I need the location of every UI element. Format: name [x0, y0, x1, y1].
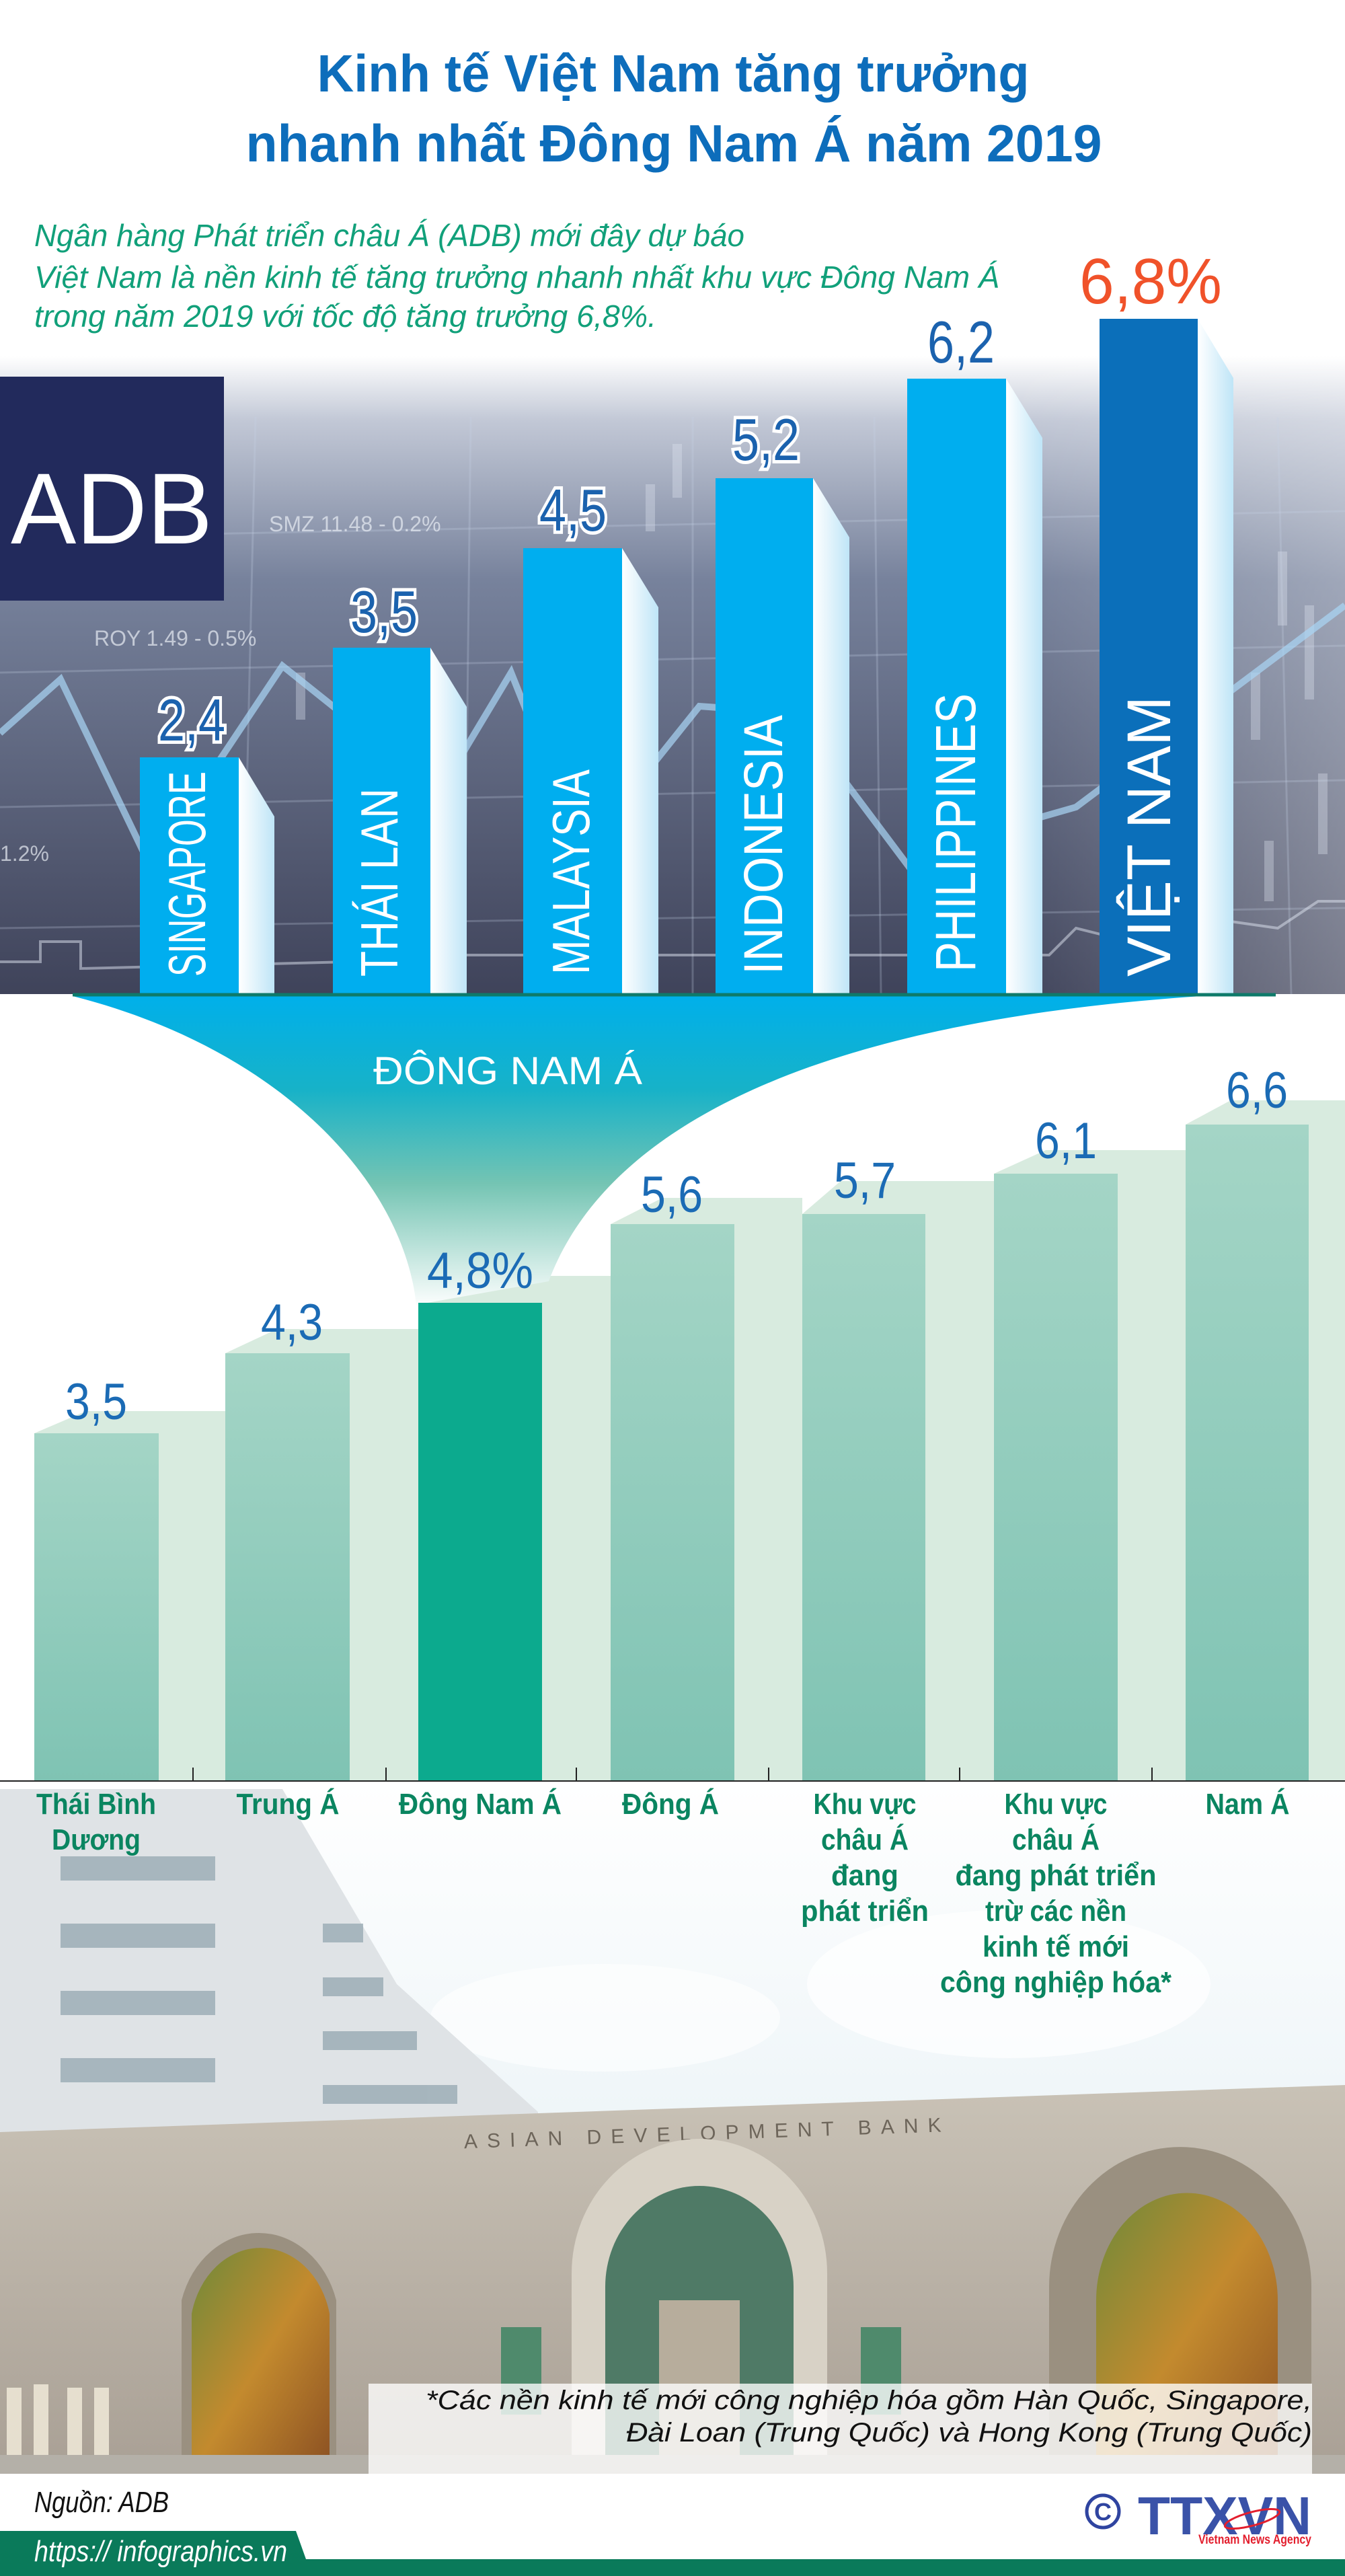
bar: Thái Lan: 3,5 — [350, 578, 418, 645]
bar: Thái Bình Dương — [34, 1373, 159, 1781]
bottom photo: ADB building: ASIAN DEVELOPMENT BANK — [463, 2114, 942, 2153]
category labels: Đông Á — [622, 1787, 719, 1821]
category labels: đang — [831, 1859, 898, 1892]
category labels: trừ các nền — [985, 1895, 1126, 1928]
background: stock market photo: ROY 1.49 - 0.5% — [94, 626, 256, 650]
footer band: https:// infographics.vn — [34, 2535, 287, 2568]
footnote — [369, 2384, 1312, 2474]
bar: Việt Nam: 6,8% — [1079, 245, 1222, 317]
logo: TTXVN: TTXVN — [1138, 2486, 1311, 2546]
bar: Đông Nam Á — [418, 1242, 542, 1781]
footer band — [0, 2531, 1345, 2576]
category labels: đang phát triển — [955, 1859, 1157, 1892]
background: stock market photo: 1.2% — [0, 841, 49, 866]
source: Nguồn: ADB — [34, 2486, 169, 2519]
axis line — [0, 1768, 1345, 1781]
bar: Trung Á — [225, 1294, 350, 1781]
bar: châu Á đang phát triển trừ NIEs: 6,1 — [1035, 1112, 1097, 1170]
lower chart: back shapes — [34, 1100, 1345, 1781]
subtitle text: Ngân hàng Phát triển châu Á (ADB) mới đây dự báo — [34, 218, 744, 253]
category labels: Thái Bình — [36, 1788, 156, 1821]
bar: Indonesia: 5,2 — [732, 406, 800, 473]
category labels: Trung Á — [237, 1787, 339, 1821]
bottom photo: ADB building — [0, 1781, 1345, 2474]
bar: Việt Nam: VIỆT NAM — [1115, 696, 1184, 977]
category labels: châu Á — [1012, 1823, 1100, 1856]
title — [246, 44, 1102, 173]
right arch mural — [1049, 2147, 1311, 2474]
bar: Philippines — [907, 309, 1042, 994]
bar: Malaysia: MALAYSIA — [541, 769, 601, 975]
category labels: Dương — [52, 1823, 141, 1856]
background: stock market photo — [0, 356, 1345, 994]
bar: Philippines: 6,2 — [927, 309, 995, 375]
subtitle text: Việt Nam là nền kinh tế tăng trưởng nhanh nhất khu vực Đông Nam Á — [34, 260, 999, 295]
funnel: Đông Nam Á — [73, 995, 1276, 1305]
ADB logo box — [0, 377, 224, 601]
center arch — [572, 2139, 827, 2474]
category labels: Đông Nam Á — [399, 1787, 562, 1821]
bar: Singapore: SINGAPORE — [157, 771, 217, 977]
bar: châu Á đang phát triển trừ NIEs — [994, 1112, 1118, 1781]
bar: Singapore — [140, 687, 274, 994]
category labels: Nam Á — [1205, 1787, 1290, 1821]
bar: Thái Bình Dương: 3,5 — [65, 1373, 127, 1431]
logo: TTXVN: Vietnam News Agency — [1198, 2533, 1311, 2547]
left arch mural — [182, 2233, 336, 2474]
left office building — [0, 1789, 538, 2139]
bar: Philippines: PHILIPPINES — [924, 693, 987, 972]
category labels: công nghiệp hóa* — [940, 1966, 1172, 1999]
category labels: châu Á — [821, 1823, 909, 1856]
bar: Đông Á: 5,6 — [641, 1166, 703, 1223]
category labels: Khu vực — [814, 1788, 916, 1821]
bar: Khu vực châu Á đang phát triển — [802, 1152, 925, 1781]
footnote: *Các nền kinh tế mới công nghiệp hóa gồm Hàn Quốc, Singapore, — [426, 2386, 1312, 2415]
bar: Đông Nam Á: 4,8% — [427, 1242, 533, 1299]
bar: Thái Lan — [333, 578, 467, 994]
logo: TTXVN: C — [1094, 2498, 1112, 2526]
bar: Thái Lan: THÁI LAN — [350, 788, 409, 977]
bar: Singapore: 2,4 — [158, 687, 225, 753]
facade — [0, 2085, 1345, 2474]
funnel: Đông Nam Á: ĐÔNG NAM Á — [373, 1049, 642, 1093]
title: Kinh tế Việt Nam tăng trưởng — [317, 44, 1029, 103]
category labels — [36, 1787, 1290, 1999]
ADB logo box: ADB — [11, 452, 213, 565]
bar: Nam Á — [1186, 1062, 1309, 1781]
background: stock market photo: SMZ 11.48 - 0.2% — [269, 512, 441, 536]
subtitle text: trong năm 2019 với tốc độ tăng trưởng 6,8%. — [34, 299, 656, 334]
category labels: Khu vực — [1005, 1788, 1107, 1821]
bar: Malaysia: 4,5 — [539, 477, 607, 543]
subtitle text — [34, 218, 999, 334]
lower bar chart: Asian regions — [34, 1062, 1309, 1781]
category labels: kinh tế mới — [983, 1930, 1129, 1963]
footnote: Đài Loan (Trung Quốc) và Hong Kong (Trung Quốc) — [626, 2418, 1312, 2448]
title: nhanh nhất Đông Nam Á năm 2019 — [246, 114, 1102, 173]
bar: Trung Á: 4,3 — [261, 1294, 323, 1351]
bar: Indonesia — [716, 406, 849, 994]
category labels: phát triển — [801, 1895, 929, 1928]
bar: Nam Á: 6,6 — [1226, 1062, 1288, 1119]
bar: Indonesia: INDONESIA — [733, 715, 794, 975]
bar: Đông Á — [611, 1166, 734, 1781]
bar chart: Southeast Asian countries — [140, 245, 1233, 994]
bar: Việt Nam — [1079, 245, 1233, 994]
bar: Malaysia — [523, 477, 658, 994]
bar: Khu vực châu Á đang phát triển: 5,7 — [834, 1152, 896, 1209]
